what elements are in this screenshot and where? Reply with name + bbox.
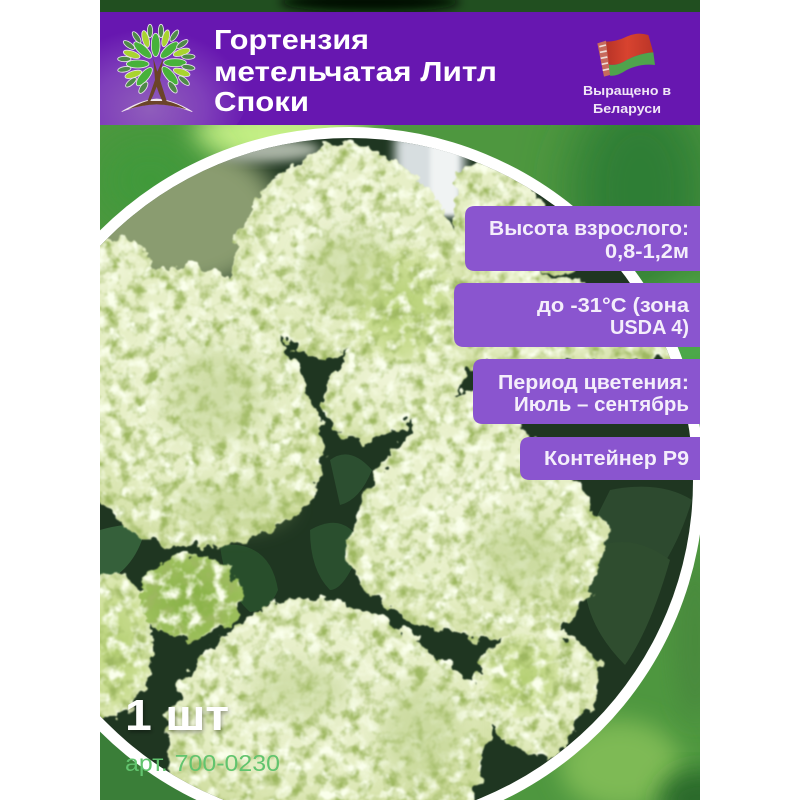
panel: height: Высота взрослого:	[489, 218, 689, 240]
logo tree	[117, 24, 195, 112]
header band	[100, 12, 700, 125]
cluster: lower right large	[345, 390, 608, 640]
cluster: behind panels	[430, 272, 680, 365]
cluster shading	[165, 230, 565, 780]
white oval frame	[100, 127, 700, 800]
info panels	[454, 206, 700, 480]
panel: container	[520, 437, 700, 480]
title	[214, 24, 497, 117]
photo card	[100, 0, 700, 800]
article number: арт. 700-0230	[125, 750, 280, 776]
grown in Belarus label: Беларуси	[593, 101, 661, 116]
panel: height	[465, 206, 700, 271]
cluster: left top	[100, 234, 154, 309]
title: метельчатая Литл	[214, 56, 497, 87]
hydrangea clusters	[68, 142, 680, 800]
cluster: small green	[138, 555, 242, 639]
quantity label: 1 шт	[125, 691, 229, 740]
belarus flag	[597, 34, 655, 77]
panel: hardiness	[454, 283, 700, 347]
cluster: lower left	[77, 573, 153, 717]
panel: flowering period: Июль – сентябрь	[514, 394, 689, 416]
cluster: top cone	[232, 142, 470, 360]
cluster: bottom right	[470, 625, 600, 760]
panel: container: Контейнер Р9	[544, 448, 689, 470]
cluster: top right	[455, 165, 575, 280]
panel: flowering period	[473, 359, 700, 424]
panel: hardiness: USDA 4)	[610, 317, 689, 339]
cluster: bottom center	[165, 597, 495, 800]
oval flower photo	[100, 138, 693, 800]
cluster: middle lime	[322, 330, 470, 439]
logo glow	[100, 37, 241, 125]
dark leaves	[100, 454, 692, 665]
foliage backdrop	[80, 120, 710, 800]
grown in Belarus label	[583, 83, 671, 116]
panel: flowering period: Период цветения:	[498, 372, 689, 394]
cluster: left big	[90, 265, 323, 547]
panel: hardiness: до -31°C (зона	[537, 295, 690, 317]
panel: height: 0,8-1,2м	[605, 241, 689, 263]
title: Гортензия	[214, 24, 369, 55]
title: Споки	[214, 86, 309, 117]
grown in Belarus label: Выращено в	[583, 83, 671, 98]
